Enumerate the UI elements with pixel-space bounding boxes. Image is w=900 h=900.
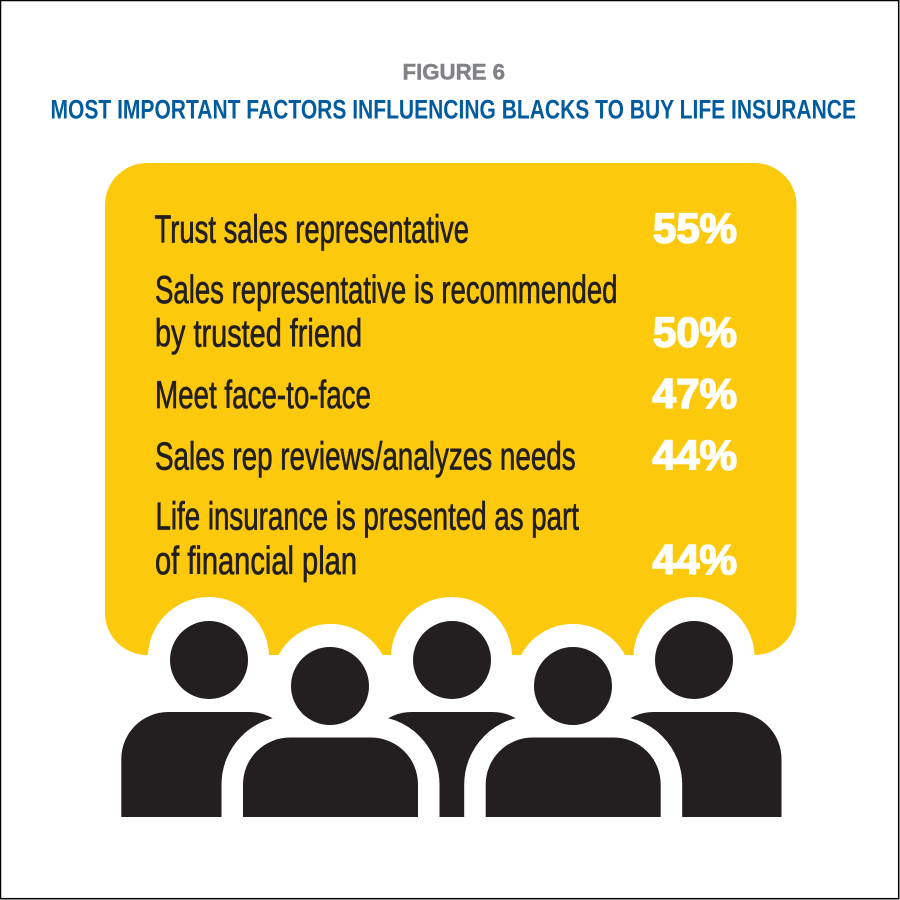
factor 2: 50%: [653, 309, 737, 356]
person 3: [413, 621, 491, 699]
factor 3: Meet face-to-face: [155, 374, 371, 417]
person 4 body: [486, 738, 661, 817]
factor 5: [155, 495, 737, 583]
icon: group of five people: [100, 597, 800, 857]
factor 1: [154, 204, 737, 251]
factor 4: 44%: [652, 431, 737, 478]
factor 2: Sales representative is recommended: [155, 269, 618, 312]
factor 5: of financial plan: [155, 540, 357, 583]
factor 3: 47%: [652, 370, 737, 417]
factor 2: [155, 269, 737, 356]
panel: yellow background: [105, 163, 796, 655]
factor list: [154, 204, 737, 583]
factor 5: Life insurance is presented as part: [156, 495, 579, 538]
factor 4: Sales rep reviews/analyzes needs: [155, 435, 576, 478]
person 1: [170, 621, 248, 699]
person 5: [655, 621, 733, 699]
factor 1: 55%: [653, 204, 737, 251]
factor 2: by trusted friend: [155, 313, 362, 356]
person 4 head: [534, 647, 612, 725]
person 2 head: [291, 647, 369, 725]
person 2 body: [243, 738, 418, 817]
factor 3: [155, 370, 737, 417]
factor 5: 44%: [652, 536, 737, 583]
factor 1: Trust sales representative: [154, 208, 469, 251]
figure label: FIGURE 6: [402, 59, 505, 84]
